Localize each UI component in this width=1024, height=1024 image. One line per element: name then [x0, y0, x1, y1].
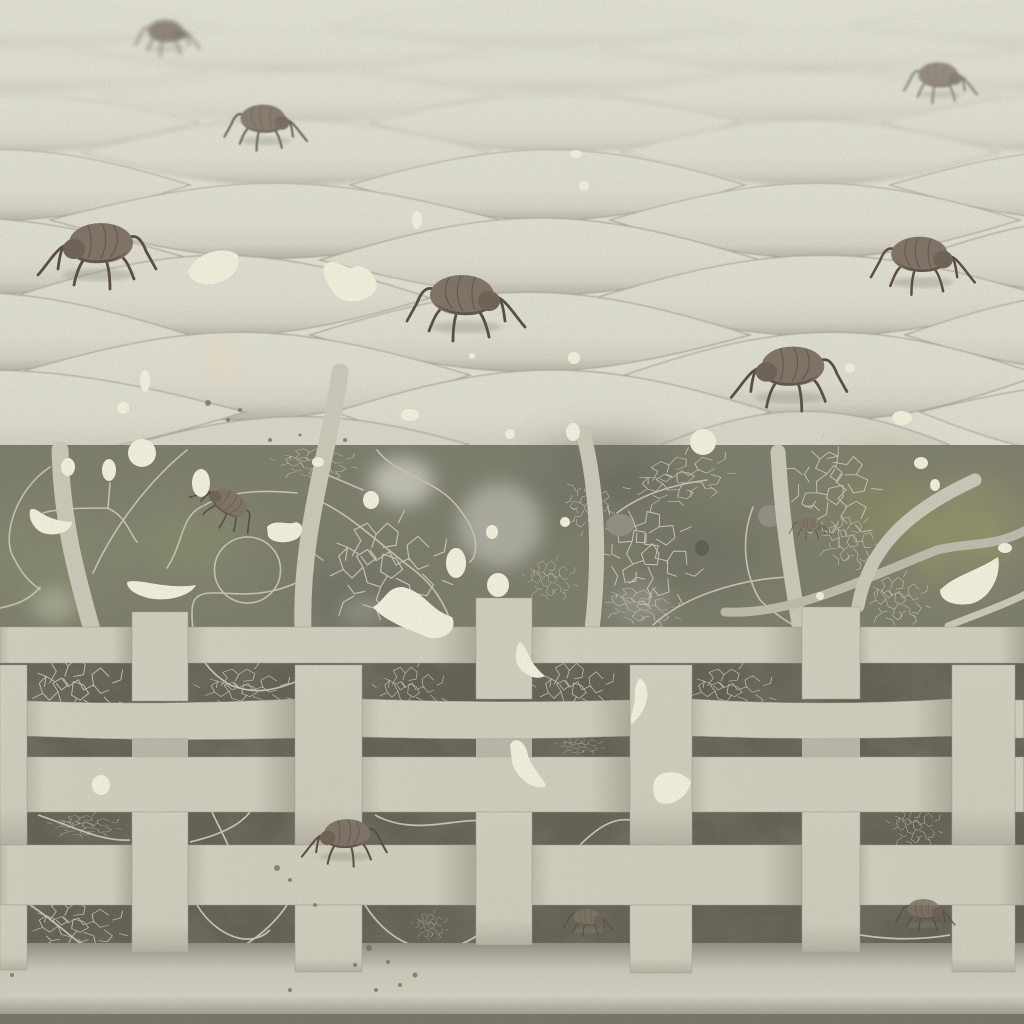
- vertical strap ends over the base: [0, 598, 1015, 973]
- mite: faint in fibres: [789, 517, 832, 541]
- mite: surface left: [38, 223, 156, 289]
- faint blurred flake: [208, 340, 236, 384]
- thick pale fibres: [60, 372, 1024, 630]
- base shadow strip: [0, 1014, 1024, 1024]
- horizontal straps, rows 2 and 3: [27, 699, 1024, 812]
- quilted mattress surface: [0, 0, 1024, 470]
- vertical straps, over rows 2 and 3: [0, 665, 1015, 845]
- horizontal straps, rows 1 and 4: [0, 627, 1024, 905]
- vertical straps, under rows 2 and 3: [132, 738, 860, 757]
- mite: under weave right: [896, 899, 955, 932]
- woven straps: [0, 627, 1024, 905]
- dust specks: [10, 400, 418, 992]
- mite: surface lower right: [731, 346, 847, 411]
- mite: distant right: [904, 62, 977, 103]
- mite: distant left: [135, 20, 200, 56]
- mycelium tangles: [270, 420, 931, 632]
- mottled olive patches: [0, 450, 1024, 625]
- mite: distant centre left: [224, 105, 307, 151]
- mould clouds: [33, 458, 668, 623]
- dark void behind the weave: [0, 635, 1024, 950]
- lower fibres and mycelium: [21, 613, 950, 971]
- mite: under weave centre: [564, 909, 613, 936]
- thin fibres: [0, 450, 793, 703]
- skin flakes: [30, 150, 1012, 804]
- inner fibre layer: [0, 372, 1024, 703]
- mite: surface centre: [407, 275, 525, 341]
- mattress base band: [0, 943, 1024, 1014]
- mite: on weave: [302, 819, 387, 867]
- grey blobs: [606, 505, 782, 556]
- mite: in fibre layer: [185, 473, 263, 543]
- mite: surface right: [871, 237, 975, 295]
